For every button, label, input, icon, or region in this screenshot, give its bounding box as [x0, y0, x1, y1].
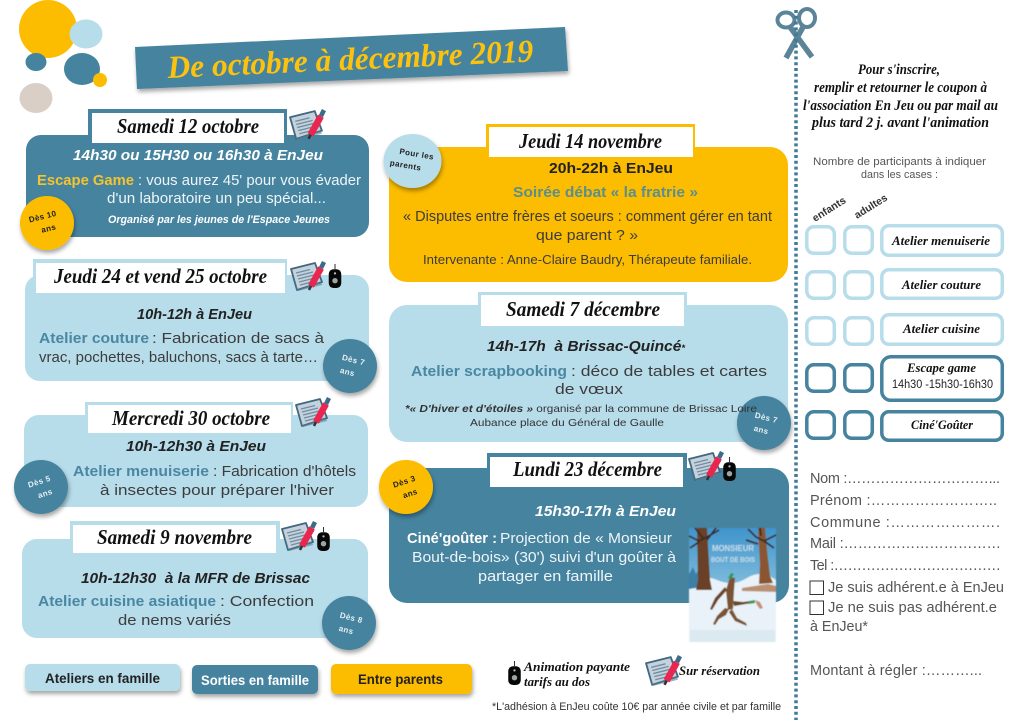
column headers: adultes [852, 192, 890, 222]
panel: Lundi 23 décembre: Dès 3 [392, 474, 417, 490]
registration instructions: l'association En Jeu ou par mail au [803, 98, 998, 114]
form fields: Prénom :…………………….. [810, 493, 997, 509]
participants note: Nombre de participants à indiquer [813, 156, 986, 168]
icon: scissors [778, 9, 815, 58]
legend: icon meanings: tarifs au dos [524, 674, 590, 689]
panel: Lundi 23 décembre: Ciné'goûter : [407, 530, 497, 547]
form fields: Commune :…………………. [810, 515, 1000, 531]
panel: Samedi 9 novembre: Samedi 9 novembre [97, 525, 252, 549]
panel: Mercredi 30 octobre: : Fabrication d'hôtels [213, 463, 356, 480]
form fields: Mail :…………………………… [810, 536, 1001, 552]
column headers [810, 192, 890, 225]
form fields: Nom :…………………………... [810, 471, 1000, 487]
panel: Samedi 9 novembre: Dès 8 [339, 611, 364, 625]
panel: Jeudi 24 et vend 25 octobre: : Fabrication de sacs à [152, 330, 325, 347]
panel: Samedi 7 décembre: ans [753, 424, 770, 436]
panel: Jeudi 24 et vend 25 octobre: Atelier couture [39, 330, 149, 347]
footnote: *L'adhésion à EnJeu coûte 10€ par année civile et par famille [492, 701, 781, 713]
panel: Samedi 7 décembre: 14h-17h à Brissac-Quincé * [487, 338, 686, 355]
panel: Jeudi 24 et vend 25 octobre: ans [339, 366, 356, 378]
panel: Lundi 23 décembre: Projection de « Monsieur [500, 530, 672, 547]
film poster: Monsieur Bout-de-Bois: MONSIEUR [712, 544, 754, 553]
form fields: Je suis adhérent.e à EnJeu [828, 580, 1004, 596]
participants note [813, 156, 986, 181]
panel: Jeudi 14 novembre: parents [389, 158, 422, 173]
panel: Samedi 7 décembre [389, 292, 791, 450]
panel: Samedi 9 novembre: Atelier cuisine asiatique [38, 593, 216, 610]
coupon grid: activity rows: Atelier cuisine [902, 321, 980, 336]
panel: Jeudi 24 et vend 25 octobre: 10h-12h à EnJeu [137, 306, 252, 323]
panel: Samedi 7 décembre: *« D'hiver et d'étoiles » organisé par la commune de Brissac Loire [405, 403, 757, 415]
panel: Mercredi 30 octobre: Dès 5 [27, 474, 52, 490]
panel: Jeudi 14 novembre [384, 124, 788, 282]
coupon grid: activity rows [807, 226, 1002, 440]
form fields: Tel :……………………………… [810, 558, 1001, 574]
panel: Mercredi 30 octobre: Mercredi 30 octobre [111, 406, 270, 430]
title banner: De octobre à décembre 2019 [166, 32, 534, 85]
panel: Samedi 12 octobre: ans [40, 222, 57, 235]
panel: Samedi 12 octobre: 14h30 ou 15H30 ou 16h30 à EnJeu [73, 147, 323, 164]
film poster: Monsieur Bout-de-Bois: BOUT DE BOIS [711, 555, 755, 564]
panel: Jeudi 24 et vend 25 octobre: Dès 7 [341, 353, 366, 367]
legend: colour keys: Ateliers en famille [45, 671, 160, 686]
panel: Jeudi 14 novembre: « Disputes entre frères et soeurs : comment gérer en tant [403, 208, 773, 225]
panel: Mercredi 30 octobre: ans [37, 487, 54, 500]
coupon grid: activity rows: Atelier menuiserie [891, 233, 990, 248]
legend: icon meanings: Sur réservation [679, 663, 760, 678]
column headers: enfants [810, 194, 848, 225]
panel: Samedi 7 décembre: Dès 7 [754, 411, 779, 425]
participants note: dans les cases : [861, 169, 938, 181]
legend: icon meanings [508, 656, 760, 689]
form fields [810, 471, 1004, 679]
panel: Jeudi 14 novembre: Soirée débat « la fratrie » [513, 184, 698, 201]
panel: Samedi 9 novembre: : Confection [220, 593, 314, 610]
legend: icon meanings: Animation payante [523, 659, 630, 674]
panel: Samedi 7 décembre: Samedi 7 décembre [506, 297, 660, 321]
panel: Samedi 7 décembre: de vœux [555, 381, 624, 398]
panel: Samedi 7 décembre: Aubance place du Général de Gaulle [470, 417, 664, 429]
panel: Samedi 12 octobre [20, 109, 369, 250]
form fields: à EnJeu* [810, 619, 868, 635]
panel: Jeudi 14 novembre: Jeudi 14 novembre [518, 129, 662, 153]
panel: Mercredi 30 octobre [14, 398, 368, 514]
form fields: Montant à régler :………... [810, 663, 982, 679]
registration instructions: plus tard 2 j. avant l'animation [810, 115, 989, 131]
registration instructions: Pour s'inscrire, [858, 62, 940, 78]
panel: Samedi 9 novembre [22, 521, 376, 650]
panel: Samedi 12 octobre: Dès 10 [28, 209, 58, 224]
coupon grid: activity rows: Ciné'Goûter [911, 417, 974, 432]
panel: Samedi 12 octobre: Escape Game [37, 172, 134, 189]
coupon grid: activity rows: 14h30 -15h30-16h30 [892, 379, 993, 391]
panel: Samedi 9 novembre: ans [338, 624, 355, 636]
legend: colour keys [25, 664, 472, 694]
panel: Samedi 7 décembre: Atelier scrapbooking [411, 363, 567, 380]
panel: Samedi 12 octobre: Organisé par les jeunes de l'Espace Jeunes [108, 214, 330, 226]
coupon grid: activity rows: Atelier couture [901, 277, 981, 292]
panel: Samedi 12 octobre: Samedi 12 octobre [117, 114, 259, 138]
panel: Lundi 23 décembre: 15h30-17h à EnJeu [535, 503, 676, 520]
legend: colour keys: Entre parents [358, 672, 443, 687]
panel: Samedi 9 novembre: de nems variés [118, 612, 231, 629]
panel: Lundi 23 décembre: partager en famille [478, 568, 613, 585]
panel: Lundi 23 décembre [379, 452, 789, 642]
panel: Lundi 23 décembre: ans [402, 487, 419, 500]
registration instructions: remplir et retourner le coupon à [814, 80, 987, 96]
form fields: Je ne suis pas adhérent.e [828, 600, 997, 616]
decorative bubbles [19, 0, 107, 113]
film poster: Monsieur Bout-de-Bois [689, 528, 776, 642]
panel: Lundi 23 décembre: Bout-de-bois» (30') suivi d'un goûter à [412, 549, 677, 566]
panel: Jeudi 14 novembre: Intervenante : Anne-Claire Baudry, Thérapeute familiale. [423, 252, 752, 267]
panel: Jeudi 14 novembre: que parent ? » [536, 227, 638, 244]
panel: Jeudi 14 novembre: 20h-22h à EnJeu [549, 160, 673, 177]
panel: Jeudi 24 et vend 25 octobre: Jeudi 24 et vend 25 octobre [53, 264, 267, 288]
panel: Jeudi 14 novembre: Pour les [399, 147, 435, 162]
panel: Samedi 9 novembre: 10h-12h30 à la MFR de Brissac [81, 570, 311, 587]
panel: Samedi 7 décembre: : déco de tables et cartes [571, 363, 767, 380]
panel: Jeudi 24 et vend 25 octobre [25, 259, 377, 393]
registration instructions [803, 62, 998, 131]
panel: Lundi 23 décembre: Lundi 23 décembre [512, 457, 662, 481]
legend: colour keys: Sorties en famille [201, 673, 309, 688]
dotted cut line [794, 10, 798, 720]
coupon grid: activity rows: Escape game [906, 360, 976, 375]
panel: Mercredi 30 octobre: 10h-12h30 à EnJeu [126, 438, 266, 455]
panel: Mercredi 30 octobre: Atelier menuiserie [73, 463, 209, 480]
panel: Mercredi 30 octobre: à insectes pour préparer l'hiver [100, 482, 334, 499]
panel: Jeudi 24 et vend 25 octobre: vrac, pochettes, baluchons, sacs à tarte… [39, 349, 318, 366]
panel: Samedi 12 octobre: d'un laboratoire un peu spécial... [107, 190, 326, 207]
panel: Samedi 12 octobre: : vous aurez 45' pour vous évader [138, 172, 361, 189]
